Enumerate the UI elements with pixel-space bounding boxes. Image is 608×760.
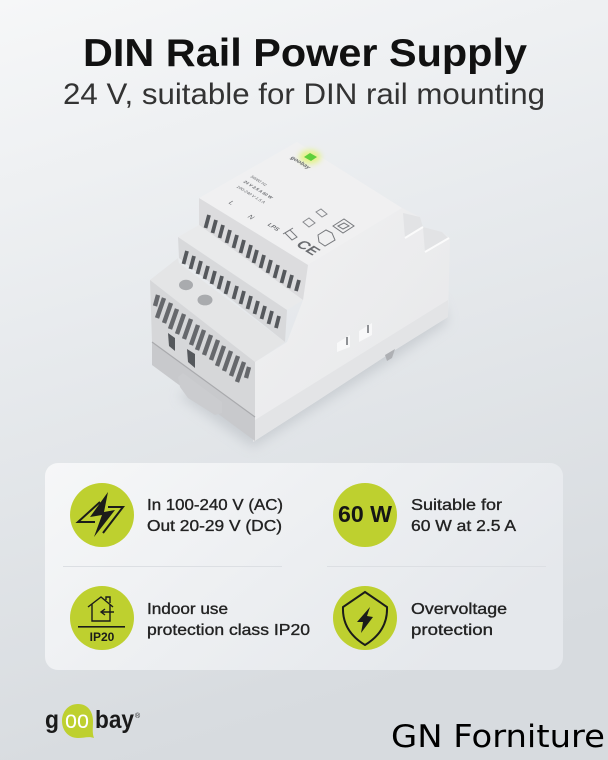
- product image: DIN rail power supply: [150, 142, 450, 447]
- label marks on the top face: N: [245, 214, 256, 221]
- base seam: [152, 342, 255, 417]
- feature: 60 W: [333, 483, 516, 547]
- icon: 60 W badge: [333, 483, 397, 547]
- second tier top: [178, 225, 303, 310]
- label marks on the top face: L: [226, 200, 236, 206]
- goobay logo: g: [45, 706, 59, 734]
- goobay logo: [45, 704, 141, 738]
- lower right rail seam: [253, 300, 448, 442]
- title: DIN Rail Power Supply: [83, 32, 527, 75]
- top face: [199, 142, 402, 265]
- text: indoor use: Indoor use: [147, 601, 228, 618]
- watermark: GN Forniture: [391, 719, 605, 755]
- base band: [152, 342, 255, 441]
- text: power: 60 W at 2.5 A: [411, 518, 516, 535]
- icon: house IP20: [70, 586, 134, 650]
- vents: [206, 215, 299, 291]
- icon: house IP20: IP20: [90, 630, 115, 644]
- text: voltage: Out 20-29 V (DC): [147, 518, 282, 535]
- rear step two: [423, 227, 448, 252]
- divider right: [327, 566, 546, 567]
- icon: shield with bolt: [333, 586, 397, 650]
- square terminals: [168, 333, 175, 351]
- divider left: [63, 566, 282, 567]
- feature: indoor use: [70, 586, 310, 650]
- status LED: [299, 150, 321, 164]
- top tier front: [199, 198, 308, 300]
- label marks on the top face: 100-240 V 1.5 A: [235, 185, 267, 204]
- icon: lightning bolt with arrows: [70, 483, 134, 547]
- label marks on the top face: goobay: [288, 156, 312, 170]
- device shadow: [178, 300, 448, 447]
- text: voltage: In 100-240 V (AC): [147, 497, 283, 514]
- label marks on the top face: [226, 156, 324, 258]
- right side body: [253, 208, 450, 442]
- label marks on the top face: CE: [292, 238, 324, 258]
- subtitle: 24 V, suitable for DIN rail mounting: [63, 78, 545, 111]
- side slots: [337, 335, 350, 352]
- label marks on the top face: 50/60 Hz: [249, 175, 269, 187]
- label marks on the top face: 24 V 2.5 A 60 W: [242, 180, 275, 200]
- text: indoor use: protection class IP20: [147, 622, 310, 639]
- text: power: Suitable for: [411, 497, 503, 514]
- goobay logo: bay: [95, 706, 134, 734]
- goobay logo: oo: [65, 706, 89, 734]
- rear step one: [403, 213, 423, 238]
- label marks on the top face: LPS: [265, 223, 280, 232]
- DIN clip tab: [178, 373, 222, 415]
- text: overvoltage: protection: [411, 622, 493, 639]
- third tier front: [150, 280, 255, 417]
- feature panel: [45, 463, 563, 670]
- round holes: [179, 280, 193, 290]
- third tier top: [150, 258, 285, 362]
- feature: input and output voltage: [70, 483, 283, 547]
- feature: overvoltage protection: [333, 586, 507, 650]
- rail clip notch: [385, 349, 395, 361]
- icon: 60 W badge: 60 W: [338, 501, 392, 527]
- second tier front: [178, 237, 287, 342]
- goobay logo: ®: [135, 712, 141, 720]
- text: overvoltage: Overvoltage: [411, 601, 507, 618]
